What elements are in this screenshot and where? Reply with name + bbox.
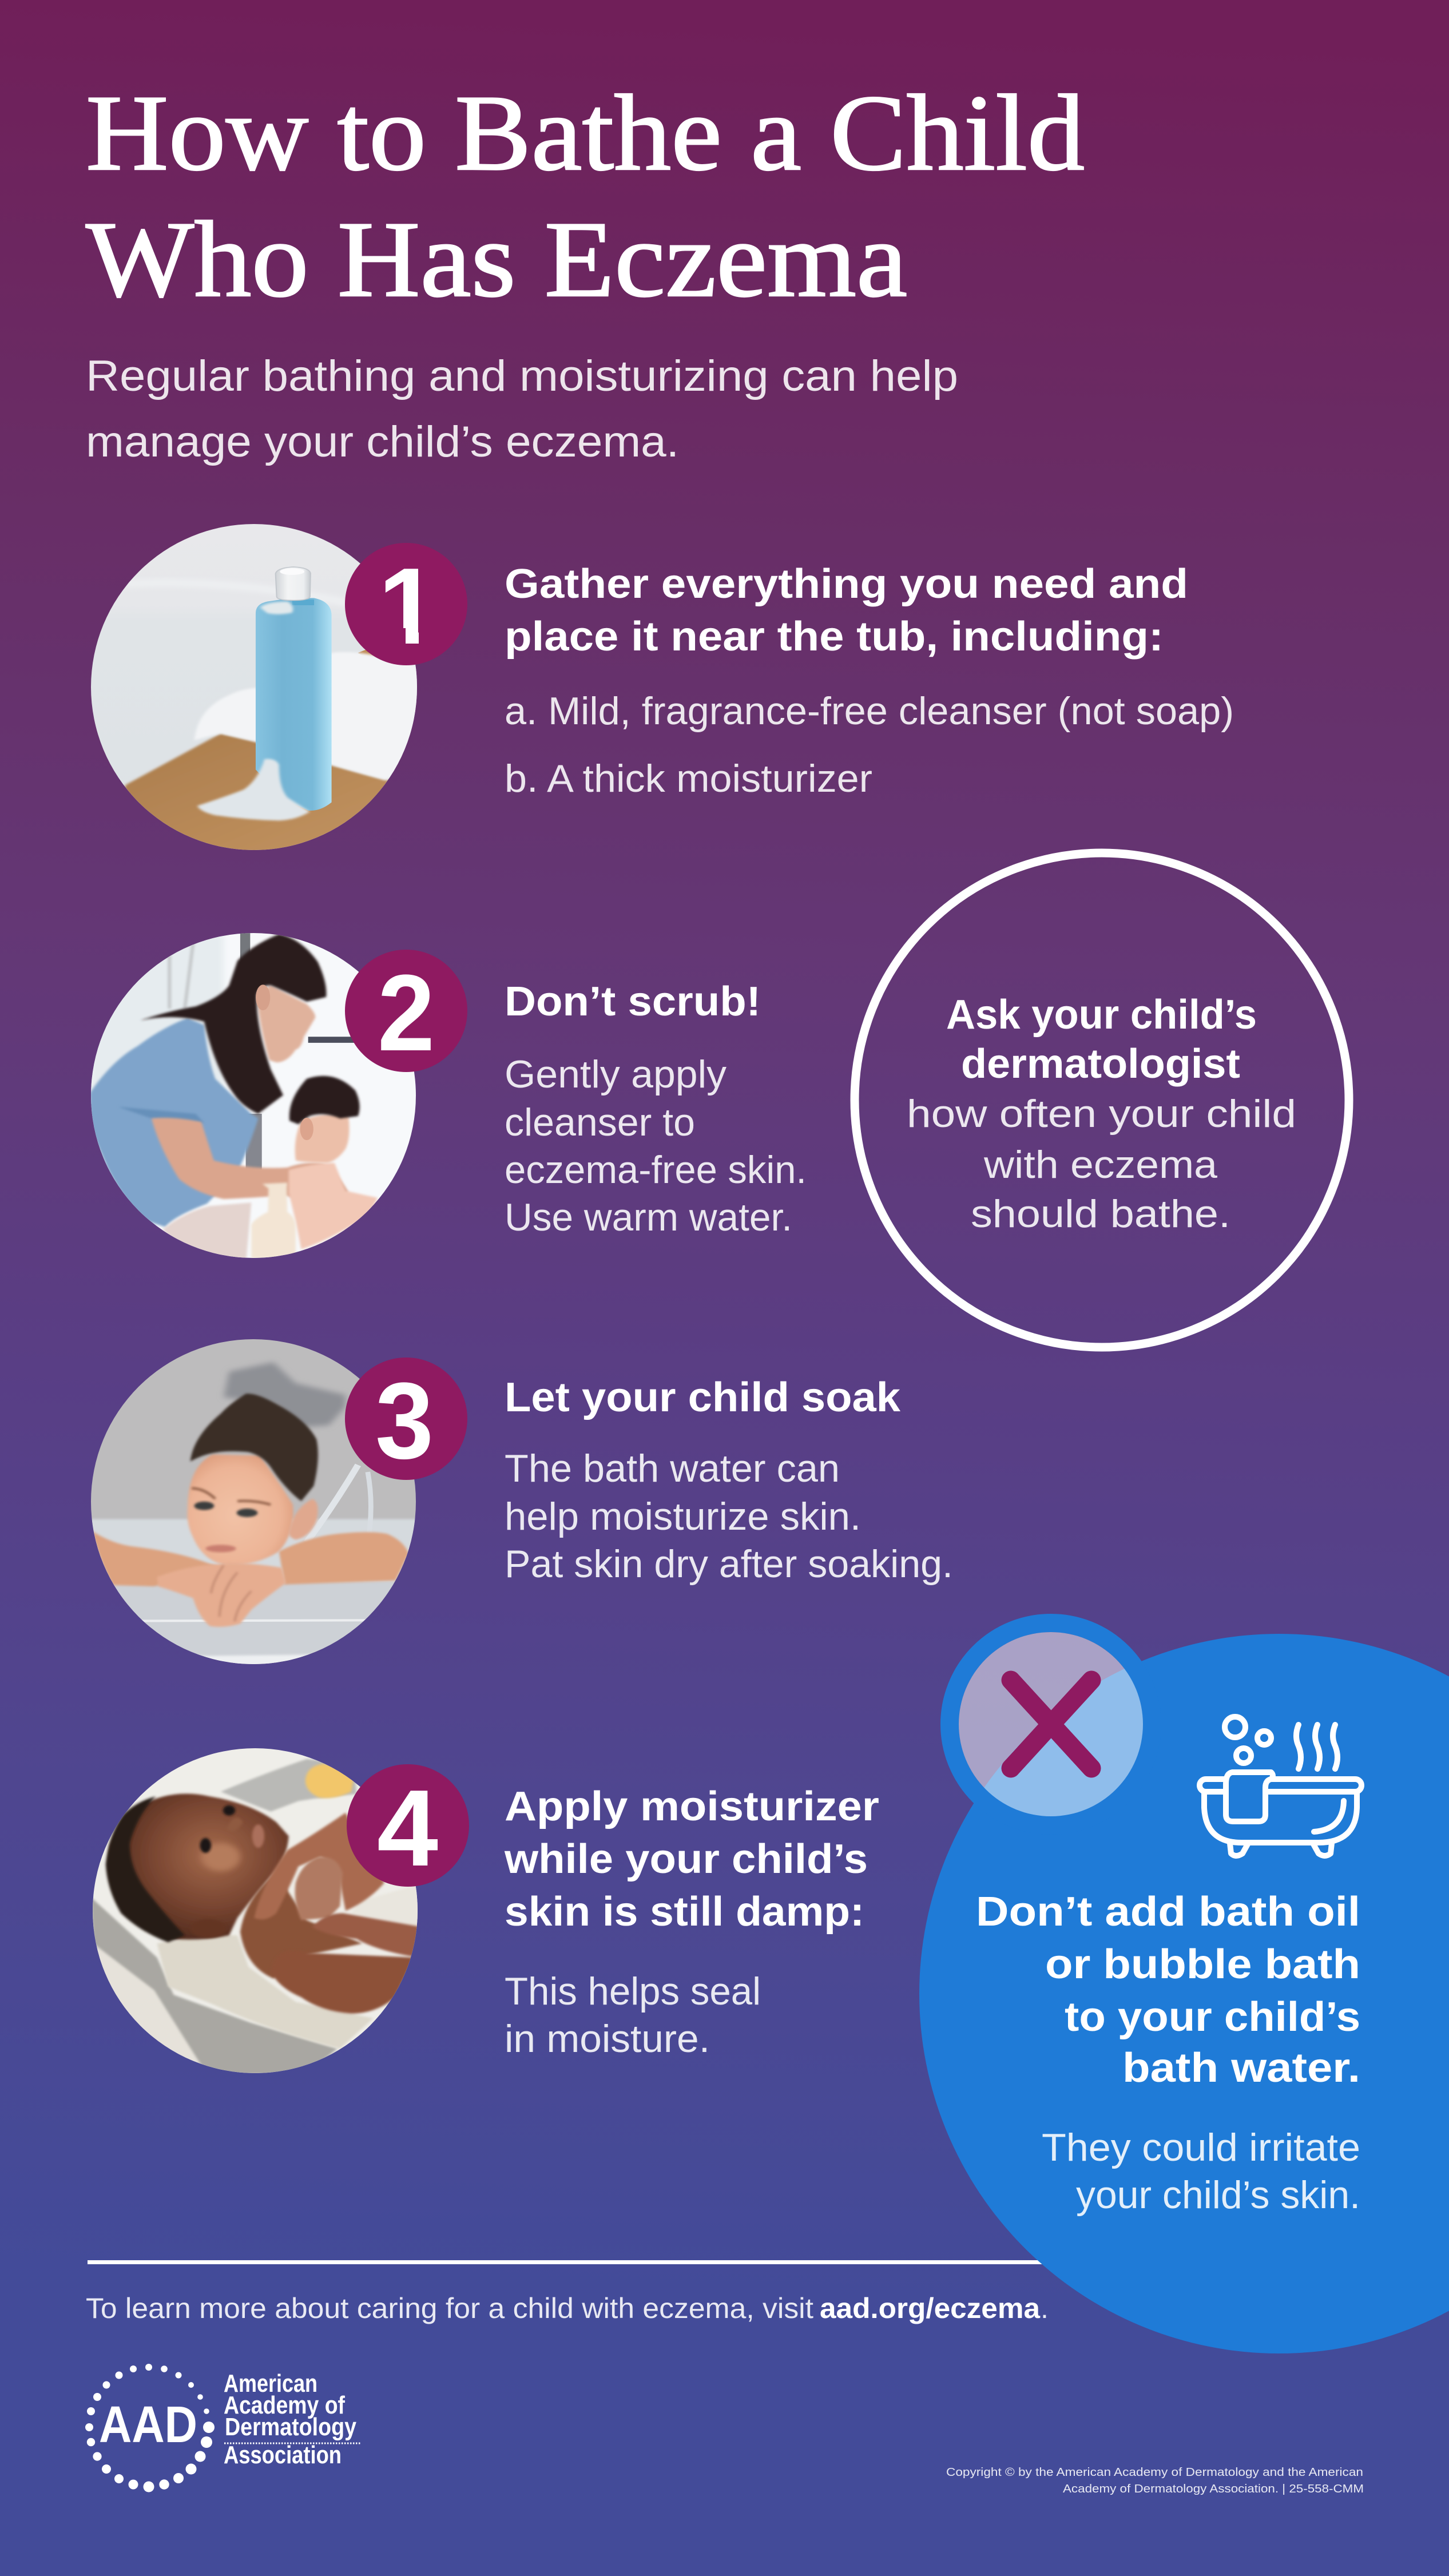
step 3 text: help moisturize skin.	[505, 1495, 861, 1538]
copyright	[946, 2466, 1364, 2495]
title: Who Has Eczema	[86, 200, 907, 320]
step 1 text: a. Mild, fragrance-free cleanser (not soap)	[505, 689, 1234, 733]
step 3 number badge	[345, 1358, 467, 1482]
logo wordmark: Academy of	[224, 2391, 345, 2419]
footer learn-more line: aad.org/eczema	[820, 2292, 1041, 2324]
step 3 text: Pat skin dry after soaking.	[505, 1542, 953, 1586]
logo ring of dots	[85, 2364, 215, 2492]
icon: no symbol	[950, 1623, 1152, 1825]
step 2 number badge: 2	[378, 952, 435, 1074]
callout: ask your dermatologist: should bathe.	[971, 1192, 1230, 1236]
step 2 text: eczema-free skin.	[505, 1148, 807, 1192]
step 2 text: Use warm water.	[505, 1196, 792, 1239]
step 1 text	[505, 561, 1234, 800]
callout: ask your dermatologist: with eczema	[983, 1143, 1217, 1186]
footer divider	[88, 2260, 1060, 2264]
step 3 text: The bath water can	[505, 1447, 840, 1490]
step 2 text: Gently apply	[505, 1053, 727, 1096]
callout: ask your dermatologist: dermatologist	[961, 1041, 1240, 1087]
step 4 text: This helps seal	[505, 1970, 761, 2013]
step 2 text	[505, 979, 807, 1239]
step 3 number badge: 3	[375, 1360, 434, 1482]
logo wordmark: Association	[224, 2441, 342, 2469]
footer learn-more line: To learn more about caring for a child with eczema, visit	[86, 2292, 813, 2324]
step 4 text: Apply moisturizer	[505, 1784, 879, 1829]
warning text: to your child’s	[1065, 1994, 1360, 2040]
subtitle	[86, 352, 958, 466]
step 2 text: Don’t scrub!	[505, 979, 761, 1025]
step 1 text: place it near the tub, including:	[505, 614, 1164, 660]
step 4 text: in moisture.	[505, 2017, 710, 2061]
blue circle background	[919, 1634, 1449, 2353]
callout: ask your dermatologist: Ask your child’s	[946, 992, 1257, 1038]
step 1 text: Gather everything you need and	[505, 561, 1188, 607]
title	[86, 73, 1085, 320]
step 4 photo: moisturizing a baby wrapped in a towel	[85, 1745, 423, 2083]
title: How to Bathe a Child	[86, 73, 1085, 193]
step 3 text: Let your child soak	[505, 1375, 901, 1420]
step 1 text: b. A thick moisturizer	[505, 757, 872, 800]
warning text: bath water.	[1122, 2045, 1360, 2091]
callout: ask your dermatologist	[855, 853, 1349, 1347]
step 1 number badge	[345, 543, 467, 667]
step 2 number badge	[345, 950, 467, 1074]
warning text	[976, 1889, 1360, 2217]
callout: ask your dermatologist: how often your child	[907, 1092, 1296, 1136]
warning text: They could irritate	[1042, 2126, 1360, 2169]
logo wordmark: Dermatology	[225, 2413, 356, 2441]
copyright: Copyright © by the American Academy of Dermatology and the American	[946, 2466, 1363, 2479]
logo wordmark	[224, 2369, 360, 2469]
step 4 text: while your child’s	[504, 1836, 868, 1882]
warning text: your child’s skin.	[1076, 2173, 1360, 2217]
icon: bathtub with bubbles and steam	[1200, 1717, 1361, 1856]
step 4 number badge: 4	[377, 1768, 438, 1889]
logo initials: AAD	[99, 2396, 197, 2454]
step 4 text	[504, 1784, 879, 2061]
warning text: or bubble bath	[1045, 1942, 1360, 1987]
subtitle: manage your child’s eczema.	[86, 418, 679, 466]
step 3 text	[505, 1375, 953, 1586]
step 2 text: cleanser to	[505, 1101, 695, 1144]
step 3 photo: child resting on the edge of a bathtub	[85, 1333, 423, 1677]
step 1 photo: bottle of cleanser on a wooden shelf	[91, 524, 417, 850]
step 4 number badge	[347, 1764, 469, 1889]
step 4 text: skin is still damp:	[505, 1889, 864, 1935]
copyright: Academy of Dermatology Association. | 25-558-CMM	[1063, 2483, 1364, 2495]
subtitle: Regular bathing and moisturizing can help	[86, 352, 958, 400]
footer learn-more line: .	[1041, 2292, 1049, 2324]
panel: don't add bath oil	[919, 1623, 1449, 2353]
step 2 photo: parent gently washing a toddler	[86, 927, 423, 1265]
logo wordmark: American	[224, 2369, 317, 2398]
warning text: Don’t add bath oil	[976, 1889, 1360, 1935]
logo: AAD	[85, 2364, 360, 2492]
step 1 number badge: 1	[378, 546, 438, 667]
